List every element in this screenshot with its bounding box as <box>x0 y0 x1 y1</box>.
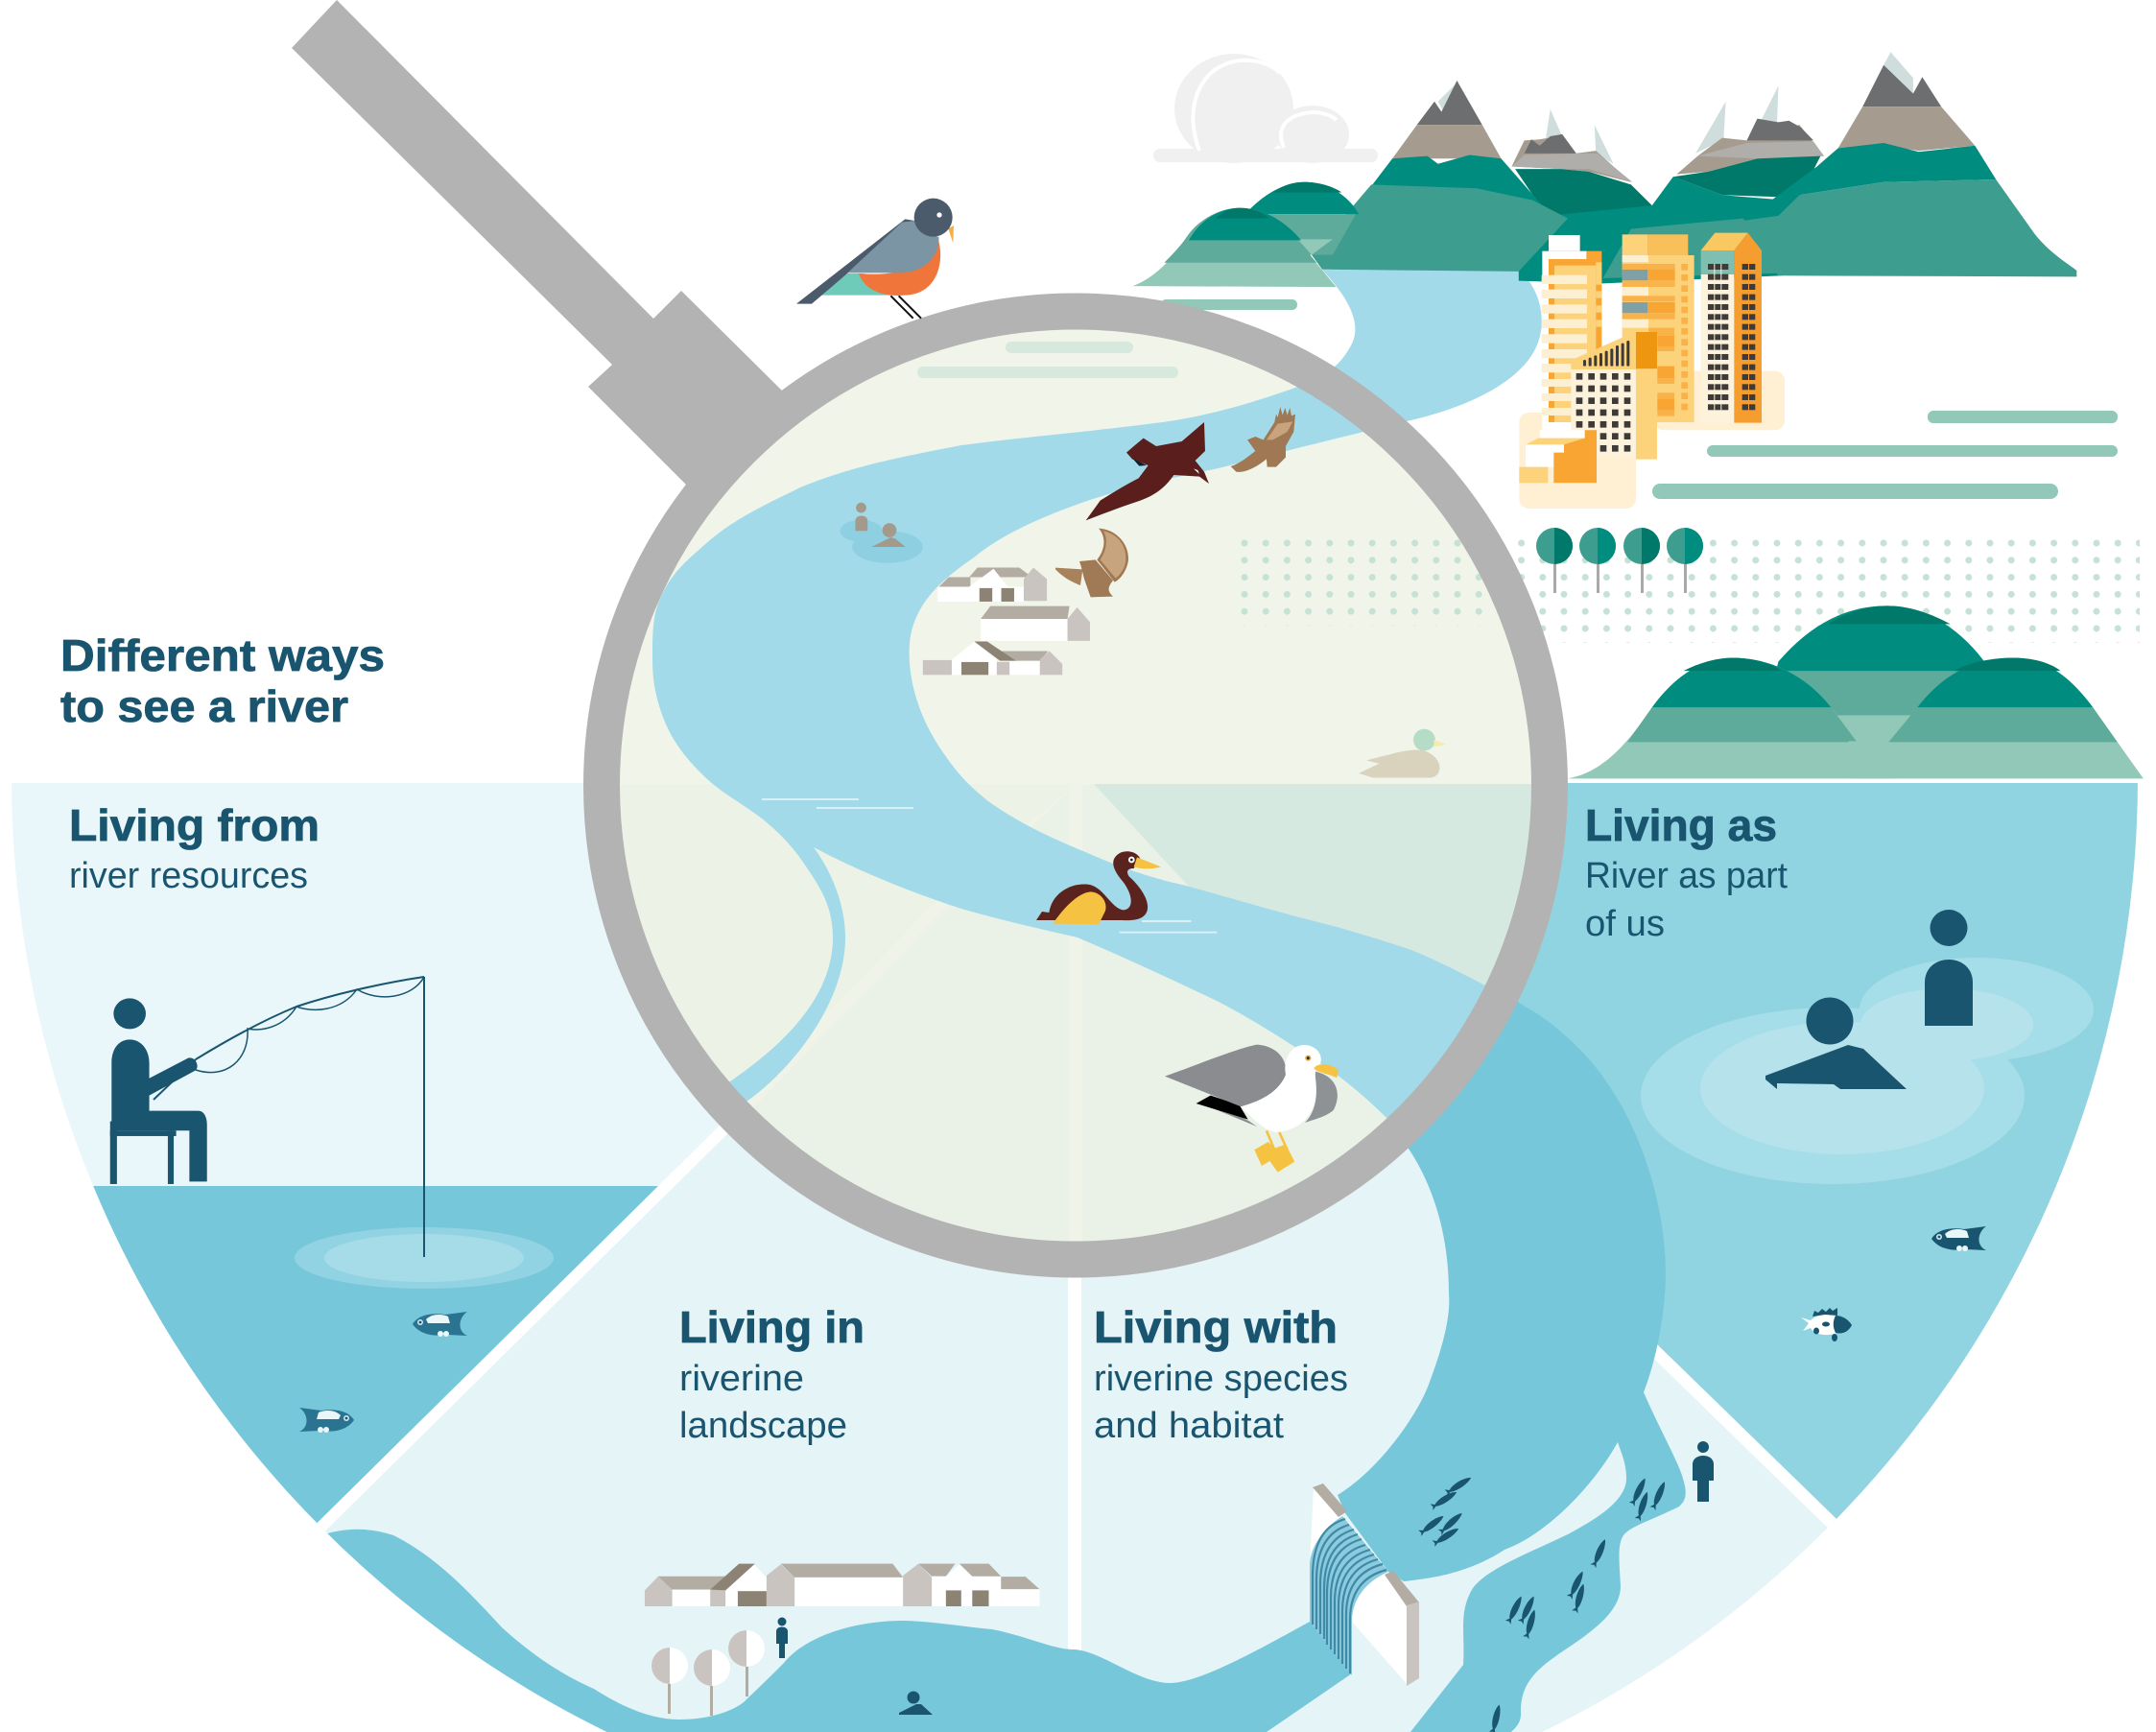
building: tall left <box>1542 235 1601 430</box>
water ripples <box>762 799 913 808</box>
panel: living from <box>12 783 720 1186</box>
person: standing by channel <box>1693 1441 1714 1502</box>
heading: living with: riverine species <box>1094 1359 1348 1399</box>
houses: riverside village <box>645 1564 1039 1606</box>
green bars <box>1161 299 2118 499</box>
hills right <box>1568 605 2144 778</box>
heading: living in: Living in <box>679 1302 865 1352</box>
heading: living from: Living from <box>69 800 320 850</box>
heading: living as: of us <box>1585 904 1665 944</box>
mountains <box>1312 52 2076 283</box>
person: swimmer in bottom river <box>899 1691 933 1715</box>
heading: living from: river resources <box>69 856 308 896</box>
fish school <box>1417 1475 1669 1732</box>
bird: duck <box>1359 729 1447 778</box>
building: centre <box>1623 234 1694 422</box>
bird: hawk <box>1231 407 1295 472</box>
bird: dark flying <box>1086 422 1209 520</box>
fish: living as spiky <box>1801 1308 1852 1341</box>
lens houses <box>923 567 1090 675</box>
heading: living from <box>69 800 320 896</box>
lens interior <box>620 330 1531 1242</box>
hills left of river <box>1132 182 1359 287</box>
heading: living as: Living as <box>1585 800 1777 850</box>
heading: living with: Living with <box>1094 1302 1338 1352</box>
icon: fisherman <box>110 977 424 1257</box>
row of trees <box>1536 528 1703 593</box>
right river and side channel <box>1338 988 1686 1732</box>
dividers <box>317 1126 1836 1650</box>
heading: living with: and habitat <box>1094 1406 1284 1446</box>
fish: living from upper <box>413 1312 467 1337</box>
heading: living as: River as part <box>1585 856 1788 896</box>
heading: living with <box>1094 1302 1348 1446</box>
heading: living in: landscape <box>679 1406 847 1446</box>
bird: swan <box>1036 851 1217 933</box>
bottom river <box>307 1530 1352 1732</box>
person: standing by village <box>776 1618 788 1658</box>
cloud <box>1153 54 1378 163</box>
heading: living in <box>679 1302 865 1446</box>
trees: bare grey <box>652 1630 765 1716</box>
panel: living in and living with <box>325 1134 1828 1732</box>
title: Different ways <box>60 630 385 680</box>
title: to see a river <box>60 681 348 731</box>
bird: robin <box>796 199 954 319</box>
bird: gull <box>1165 1045 1339 1173</box>
lens swimmers <box>840 503 923 563</box>
heading: living in: riverine <box>679 1359 804 1399</box>
heading: living as <box>1585 800 1788 944</box>
ripples: living as <box>1641 958 2094 1184</box>
building: front <box>1571 332 1657 460</box>
fish: living from lower <box>299 1408 354 1433</box>
icon: weir <box>1310 1483 1419 1686</box>
building: right tower <box>1701 233 1762 423</box>
magnifier handle <box>292 0 787 489</box>
bird: fan tail <box>1055 529 1128 597</box>
person: swimmer <box>1765 998 1907 1089</box>
panel: living from water <box>38 1186 658 1526</box>
ripple: fishing line <box>295 1227 554 1289</box>
fish: living as striped <box>1931 1226 1986 1251</box>
magnifier ring <box>602 311 1550 1259</box>
dots pattern <box>1241 539 2140 643</box>
person: standing in water <box>1925 910 1973 1026</box>
panel: living as <box>1186 783 2138 1523</box>
upper river <box>1322 270 1542 421</box>
city buildings <box>1519 233 1785 509</box>
